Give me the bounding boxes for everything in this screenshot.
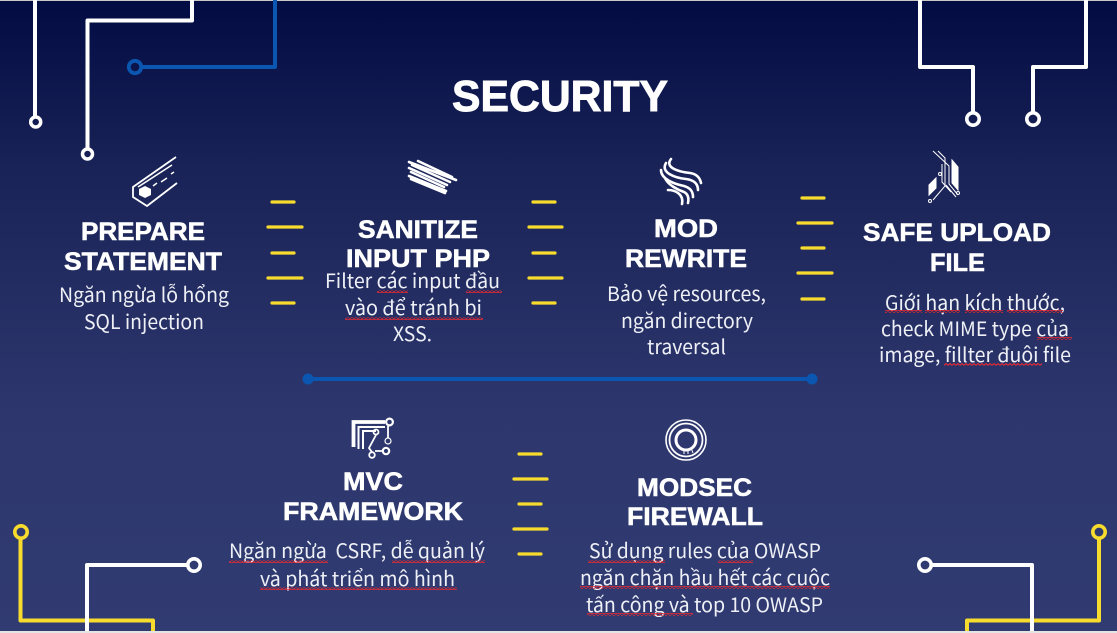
text block: và phát triển mô hình (260, 563, 455, 592)
circuit lines: top right (920, 0, 1086, 125)
heading (627, 474, 763, 531)
text block: vào để tránh bi (345, 292, 482, 321)
panel: safe upload file (863, 151, 1072, 368)
panel: modsec firewall (580, 420, 830, 618)
text block (607, 278, 766, 360)
icon: framework circuit (354, 419, 393, 458)
icon: waves (661, 159, 701, 204)
panel: sanitize input php (325, 161, 502, 347)
text block: ngăn chặn hầu hết các cuộc (580, 562, 830, 591)
circuit lines: bottom right (919, 526, 1105, 631)
text block: Bảo vệ resources, (607, 278, 766, 307)
icon: concentric rings (666, 420, 706, 460)
text block (325, 265, 502, 347)
heading: SAFE UPLOAD (863, 219, 1051, 247)
heading: MODSEC (637, 474, 752, 502)
text block: Sử dụng rules của OWASP (589, 535, 821, 564)
heading: MOD (654, 215, 718, 243)
heading: REWRITE (625, 245, 747, 273)
text block: Giới hạn kích thước, (885, 287, 1065, 316)
text block: tấn công và top 10 OWASP (586, 589, 823, 618)
heading (346, 216, 490, 273)
divider: blue connector (302, 374, 818, 384)
icon: capsule (133, 157, 177, 206)
text block: check MIME type của (881, 313, 1069, 342)
heading: SANITIZE (358, 216, 478, 244)
text block: image, fillter đuôi file (879, 339, 1071, 368)
panel: mod rewrite (607, 159, 766, 360)
title: SECURITY (452, 72, 668, 121)
text block (59, 279, 229, 335)
text block: traversal (647, 331, 726, 360)
icon: streaks (409, 161, 456, 193)
heading: FIREWALL (627, 503, 763, 531)
icon: circuit upload (928, 151, 960, 202)
text block: Filter các input đầu (325, 265, 500, 294)
divider: yellow dashes 1 (268, 202, 302, 303)
circuit lines: top left (31, 0, 275, 159)
heading (863, 219, 1051, 277)
heading: FRAMEWORK (283, 498, 463, 526)
text block (229, 535, 486, 592)
panel: mvc framework (229, 419, 486, 592)
divider: yellow dashes 3 (798, 198, 832, 299)
divider: yellow dashes 2 (529, 202, 562, 303)
heading: FILE (930, 249, 985, 277)
heading: INPUT PHP (346, 245, 490, 273)
heading: STATEMENT (64, 248, 222, 276)
heading (64, 218, 222, 276)
text block: Ngăn ngừa lỗ hổng (59, 279, 229, 308)
text block: Ngăn ngừa CSRF, dễ quản lý (229, 535, 486, 564)
divider: yellow dashes 4 (514, 454, 547, 554)
text block: XSS. (393, 318, 432, 347)
text block (580, 535, 830, 618)
heading (283, 468, 463, 526)
text block (879, 287, 1072, 368)
panel: prepare statement (59, 157, 229, 335)
heading: PREPARE (81, 218, 205, 246)
text block: SQL injection (84, 306, 204, 335)
circuit lines: bottom left (15, 526, 200, 631)
heading: MVC (343, 468, 403, 496)
text block: ngăn directory (621, 305, 754, 334)
heading (625, 215, 747, 273)
